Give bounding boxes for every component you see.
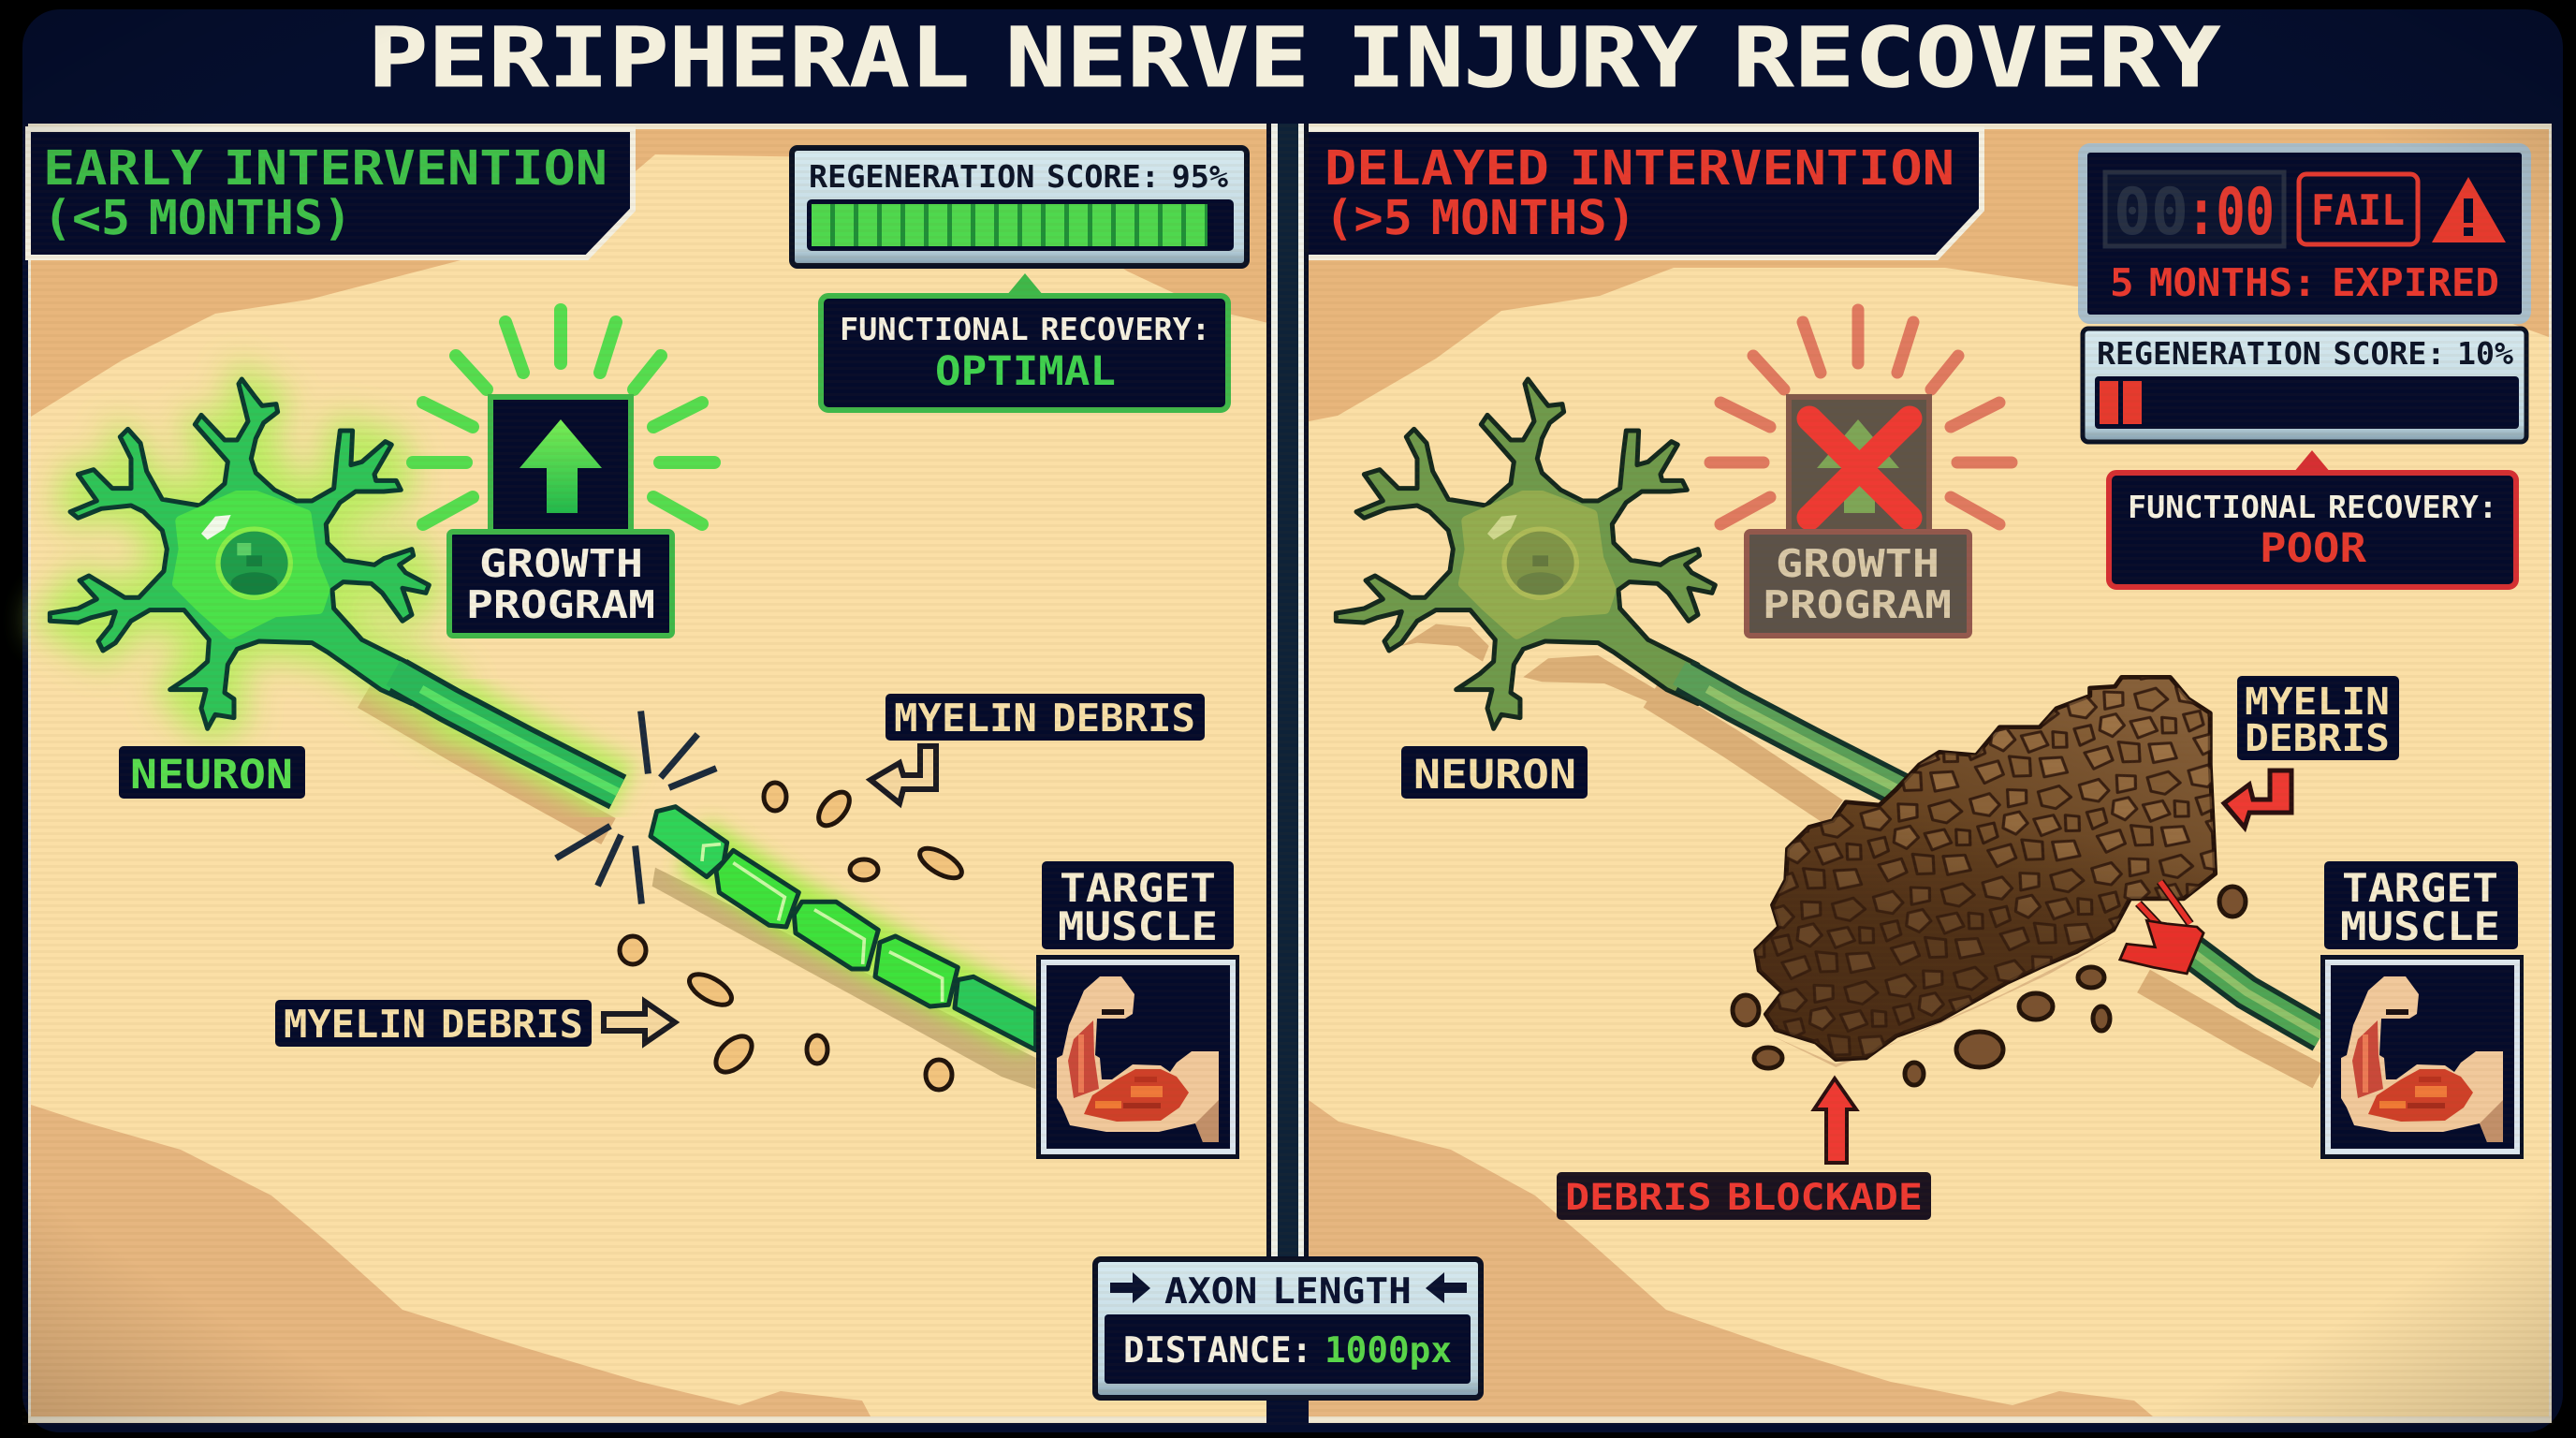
sand background [28,124,1271,1423]
title [368,9,2220,106]
label: myelin debris [2237,676,2399,760]
fail badge [2299,174,2418,244]
label: target muscle [1042,861,1234,949]
banner text: EARLY INTERVENTION [43,141,607,197]
axon [393,673,618,792]
timer panel [2083,148,2526,319]
regeneration score panel: REGENERATION SCORE: 10% [2097,335,2513,372]
axon [1679,673,1904,792]
neuron shadow [1401,624,1735,737]
rays [413,310,714,524]
label: target muscle: TARGET [2342,865,2498,911]
label: neuron: NEURON [1413,752,1576,799]
neuron [1336,379,1715,728]
title: INJURY [1347,9,1697,106]
functional recovery callout: POOR [2260,525,2366,572]
label: target muscle: MUSCLE [1058,903,1218,949]
neuron [50,379,429,728]
up arrow [520,419,602,513]
muted arrow [1817,419,1899,513]
regeneration score panel [792,148,1247,266]
growth program indicator [413,310,714,636]
regrowth glow [693,845,1036,1027]
distance readout [1105,1314,1471,1384]
digital clock [2105,172,2284,250]
timer panel: 5 MONTHS: EXPIRED [2110,260,2499,305]
muscle card [1036,955,1239,1159]
label: target muscle: TARGET [1060,865,1216,911]
panel: delayed intervention [1303,124,2552,1423]
arrow: hook to rubble [2224,770,2291,828]
label: myelin debris: MYELIN [2245,681,2390,724]
functional recovery callout: OPTIMAL [935,348,1116,395]
arrow: hook to debris [871,746,936,803]
icon: flexed arm [1057,976,1219,1142]
muscle card [2320,955,2524,1159]
regenerating axon [651,807,1036,1089]
banner text: (>5 MONTHS) [1325,191,1636,246]
arrow: to debris [604,1002,675,1043]
rubble shadow [1773,936,2116,1067]
title: RECOVERY [1733,9,2220,106]
myelin debris pills [620,783,966,1090]
label: target muscle: MUSCLE [2340,903,2500,949]
red x [1809,418,1910,518]
banner text: DELAYED INTERVENTION [1325,141,1954,197]
debris blockade rubble [1756,677,2216,1067]
regeneration score panel: REGENERATION SCORE: 95% [809,158,1228,195]
banner text: (<5 MONTHS) [43,191,352,246]
rays [1710,310,2012,524]
label: neuron [1401,746,1588,799]
title: PERIPHERAL [368,9,970,106]
label: myelin debris top: MYELIN DEBRIS [894,696,1195,741]
axon length box [1095,1259,1481,1398]
icon: flexed arm [2341,976,2503,1142]
progress bar [2095,376,2519,429]
distance readout: 1000px [1325,1329,1452,1371]
label: myelin debris lower: MYELIN DEBRIS [284,1002,583,1047]
neuron glow [50,379,449,728]
growth program indicator disabled: GROWTH [1776,541,1939,586]
segment shadow [652,868,1036,1089]
growth program indicator disabled: PROGRAM [1763,582,1952,627]
header banner [1303,129,1982,257]
fail badge: FAIL [2311,185,2405,235]
functional recovery callout: FUNCTIONAL RECOVERY: [840,311,1210,347]
label: myelin debris: DEBRIS [2245,717,2390,760]
functional recovery callout [821,273,1228,410]
progress bar [807,199,1234,251]
segment highlights [702,844,943,1002]
digital clock: 00 [2114,175,2188,250]
growth program indicator: GROWTH [479,541,643,586]
axon shadow [365,695,608,831]
label: neuron: NEURON [130,752,293,799]
axon glow [449,705,622,791]
axon shadow [1651,695,1835,813]
loose debris [1733,887,2246,1085]
arrow: up to blockade [1814,1078,1856,1163]
left arrow icon [1110,1272,1150,1303]
growth program indicator: PROGRAM [466,582,655,627]
header banner [28,129,633,257]
functional recovery callout: FUNCTIONAL RECOVERY: [2128,489,2497,525]
injury spark lines [559,714,713,901]
functional recovery callout [2109,450,2516,587]
growth program indicator disabled [1710,310,2012,636]
banner text [43,141,607,246]
label: target muscle [2324,861,2518,949]
regeneration score panel [2083,329,2526,442]
label: debris blockade: DEBRIS BLOCKADE [1565,1177,1923,1219]
axon length box: AXON LENGTH [1164,1270,1412,1312]
distance readout: DISTANCE: [1123,1329,1312,1371]
right arrow icon [1426,1272,1467,1303]
icon: warning triangle [2432,177,2506,242]
distal axon stump [2190,950,2321,1035]
frayed nerve end [2120,882,2203,974]
sand background [1303,124,2552,1423]
label: neuron [119,746,305,799]
banner text [1325,141,1954,246]
digital clock: :00 [2187,175,2275,250]
center divider [1266,124,1309,1428]
segments [651,807,1036,1050]
distal axon shadow [2144,981,2319,1077]
panel: early intervention [28,124,1271,1423]
title: NERVE [1005,9,1310,106]
